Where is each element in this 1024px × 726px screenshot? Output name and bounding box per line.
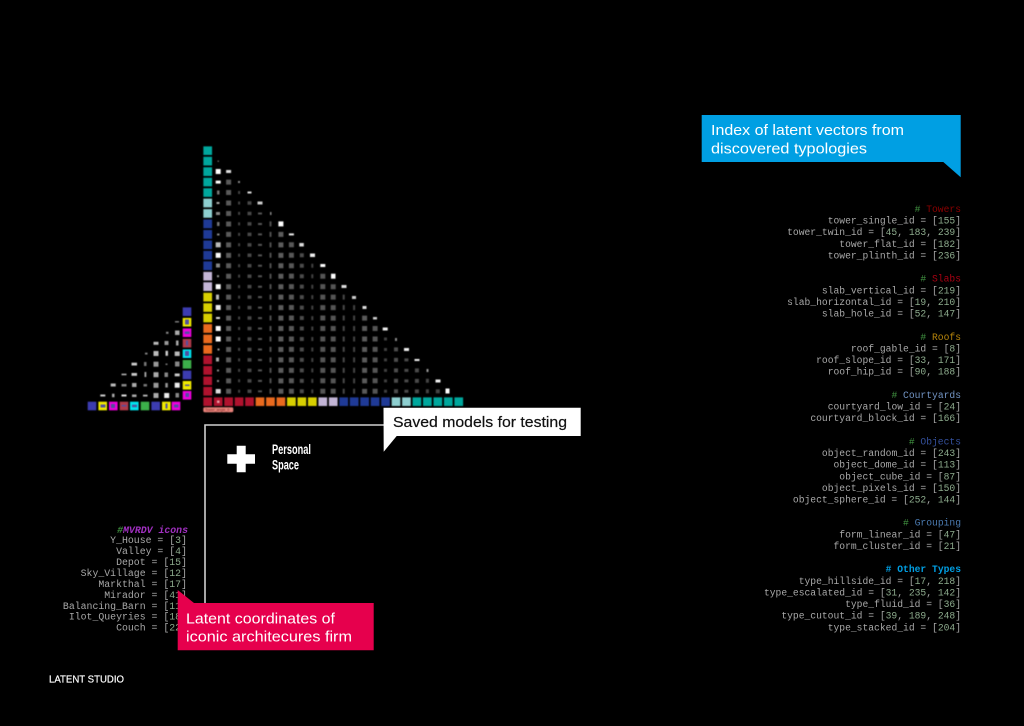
code index: courtyards: courtyard_low_id = [24]	[828, 402, 961, 413]
code index: slabs: slab_horizontal_id = [19, 210]	[787, 297, 961, 308]
code index: objects: # Objects	[909, 436, 961, 447]
code list: MVRDV icons: Markthal = [17]	[98, 579, 187, 590]
code index: towers: tower_twin_id = [45, 183, 239]	[787, 227, 961, 238]
code index: other types: type_cutout_id = [39, 189, 248]	[781, 611, 961, 622]
code index: objects: object_random_id = [243]	[822, 448, 961, 459]
code index: objects	[793, 436, 961, 506]
code index: towers: tower_plinth_id = [236]	[828, 250, 961, 262]
heading: personal space: Personal	[272, 442, 311, 457]
code index: other types: type_escalated_id = [31, 235, 142]	[764, 588, 961, 598]
code index: objects: object_sphere_id = [252, 144]	[793, 494, 961, 506]
code index: slabs: slab_hole_id = [52, 147]	[822, 309, 961, 320]
interior latent cells	[229, 180, 438, 394]
axis tag: Tower_angle_0	[205, 408, 229, 412]
code list: MVRDV icons: Couch = [22]	[116, 623, 187, 634]
code list: MVRDV icons	[63, 525, 188, 634]
code index: roofs: roof_slope_id = [33, 171]	[816, 355, 961, 366]
callout: latent coordinates: Latent coordinates of	[186, 610, 336, 627]
code index: courtyards	[810, 390, 961, 424]
code index: grouping: # Grouping	[903, 518, 961, 529]
marks inside axis squares	[100, 320, 190, 408]
code index: other types: type_hillside_id = [17, 218]	[799, 576, 961, 587]
code list: MVRDV icons: #MVRDV icons	[117, 525, 188, 536]
callout: index of latent vectors	[702, 115, 961, 177]
personal space frame	[205, 425, 385, 603]
code index: slabs: # Slabs	[920, 274, 961, 285]
latent cells	[100, 321, 180, 398]
bright first-column and diagonal cells	[216, 161, 450, 394]
code list: MVRDV icons: Ilot_Queyries = [18]	[69, 612, 187, 622]
code index: roofs	[816, 332, 961, 378]
main latent grid triangle	[203, 146, 463, 412]
bottom axis colored squares	[203, 400, 463, 403]
right axis colored squares	[183, 307, 191, 400]
code list: MVRDV icons: Valley = [4]	[116, 546, 187, 557]
callout: saved models	[384, 408, 581, 452]
bottom axis colored squares	[88, 402, 180, 410]
code index: roofs: roof_hip_id = [90, 188]	[828, 367, 961, 378]
code index: objects: object_cube_id = [87]	[839, 471, 961, 482]
callout: latent coordinates	[178, 590, 374, 650]
code index: grouping: form_linear_id = [47]	[839, 529, 961, 540]
icon: plus	[227, 446, 255, 472]
code index: courtyards: courtyard_block_id = [166]	[810, 413, 961, 424]
code index: slabs	[787, 274, 961, 320]
code index: grouping	[834, 518, 961, 552]
code index: other types: type_stacked_id = [204]	[828, 622, 961, 633]
code index: slabs: slab_vertical_id = [219]	[822, 285, 961, 296]
code index: objects: object_dome_id = [113]	[834, 460, 961, 471]
code index: other types: type_fluid_id = [36]	[845, 599, 961, 610]
code index: other types	[764, 564, 961, 633]
heading: personal space: Space	[272, 458, 299, 472]
callout: saved models: Saved models for testing	[393, 414, 567, 431]
code index: towers: # Towers	[915, 204, 961, 215]
footer label: LATENT STUDIO	[49, 673, 124, 685]
code index: towers	[787, 204, 961, 262]
code list: MVRDV icons: Mirador = [41]	[104, 590, 187, 601]
code list: MVRDV icons: Sky_Village = [12]	[81, 568, 187, 579]
axis tag	[203, 407, 233, 412]
callout: index of latent vectors: discovered typologies	[711, 140, 867, 157]
code index: objects: object_pixels_id = [150]	[822, 483, 961, 494]
code index: towers: tower_single_id = [155]	[828, 216, 961, 227]
code index: courtyards: # Courtyards	[891, 390, 961, 401]
callout: latent coordinates: iconic architecures firm	[186, 629, 352, 646]
code list: MVRDV icons: Balancing_Barn = [11]	[63, 601, 187, 612]
code list: MVRDV icons: Y_House = [3]	[110, 535, 187, 546]
code index: other types: # Other Types	[886, 564, 961, 575]
code index: grouping: form_cluster_id = [21]	[834, 541, 961, 552]
MVRDV icons latent grid triangle	[88, 307, 191, 410]
heading: personal space	[272, 442, 311, 472]
left axis colored squares	[203, 146, 212, 396]
code index: towers: tower_flat_id = [182]	[839, 239, 961, 250]
callout: index of latent vectors: Index of latent vectors from	[711, 122, 904, 139]
code index: roofs: roof_gable_id = [8]	[851, 343, 961, 354]
code list: MVRDV icons: Depot = [15]	[116, 557, 187, 568]
code index: roofs: # Roofs	[920, 332, 961, 343]
